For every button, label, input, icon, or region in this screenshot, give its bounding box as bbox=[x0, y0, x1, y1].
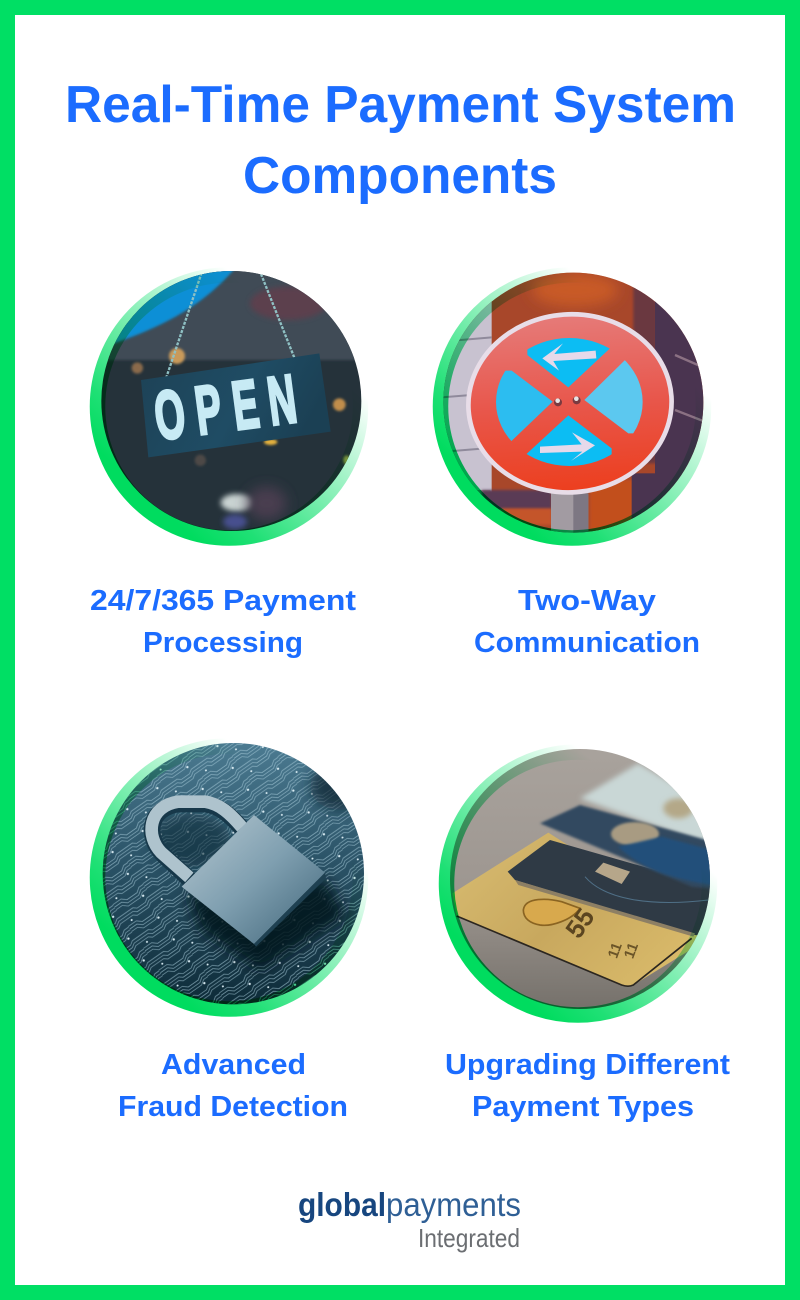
logo: global payments integrated: payments bbox=[386, 1186, 521, 1223]
blue circle segments bbox=[496, 338, 643, 466]
photo: stacked payment cards: 11 bbox=[606, 941, 626, 961]
gold card bbox=[452, 833, 712, 986]
label: 24/7/365 payment processing: Processing bbox=[143, 627, 303, 659]
padlock body bbox=[182, 815, 325, 944]
photo: stacked payment cards bbox=[450, 749, 710, 1009]
panel: two-way communication bbox=[432, 268, 711, 546]
logo: global payments integrated: global bbox=[298, 1186, 386, 1223]
right arrow bbox=[540, 432, 595, 461]
label: advanced fraud detection bbox=[118, 1049, 348, 1123]
label: advanced fraud detection: Fraud Detection bbox=[118, 1091, 348, 1123]
ring bbox=[98, 746, 360, 1009]
title: Real-Time Payment System bbox=[65, 76, 736, 134]
sign rim bbox=[466, 312, 674, 495]
logo: global payments integrated: Integrated bbox=[418, 1223, 520, 1253]
card chip bbox=[523, 899, 580, 925]
title: Components bbox=[243, 147, 557, 205]
blue card bbox=[540, 805, 725, 890]
sign word: OPEN bbox=[150, 360, 301, 455]
label: two-way communication: Two-Way bbox=[518, 585, 656, 617]
label: upgrading different payment types: Upgrading Different bbox=[445, 1049, 730, 1081]
pale card bbox=[580, 762, 704, 840]
title bbox=[65, 76, 736, 205]
label: upgrading different payment types: Payment Types bbox=[472, 1091, 694, 1123]
photo: open sign bbox=[101, 271, 362, 531]
ring bbox=[440, 275, 704, 538]
label: 24/7/365 payment processing: 24/7/365 Payment bbox=[90, 585, 356, 617]
padlock shackle bbox=[152, 804, 243, 880]
logo: global payments integrated bbox=[298, 1186, 521, 1253]
bolts bbox=[554, 398, 562, 406]
label: advanced fraud detection: Advanced bbox=[161, 1049, 306, 1081]
label: two-way communication bbox=[474, 585, 700, 659]
photo: padlock on circuit board bbox=[102, 743, 364, 1004]
hanging chains bbox=[166, 273, 295, 378]
dark card bbox=[508, 840, 725, 938]
embossed digits: 55 bbox=[559, 903, 600, 944]
sign face bbox=[470, 316, 670, 490]
panel: advanced fraud detection bbox=[90, 739, 368, 1017]
left arrow bbox=[542, 343, 596, 371]
photo: stacked payment cards: 11 bbox=[622, 941, 642, 961]
ring bbox=[446, 752, 710, 1015]
label: two-way communication: Communication bbox=[474, 627, 700, 659]
open sign board bbox=[141, 353, 331, 457]
label: 24/7/365 payment processing bbox=[90, 585, 356, 659]
sign post bbox=[551, 493, 588, 533]
photo: road sign bbox=[443, 272, 704, 533]
panel: upgrading different payment types bbox=[438, 745, 717, 1023]
panel: 24/7/365 payment processing bbox=[90, 268, 368, 546]
ring bbox=[98, 275, 360, 538]
padlock shadow bbox=[187, 880, 347, 970]
label: upgrading different payment types bbox=[445, 1049, 730, 1123]
